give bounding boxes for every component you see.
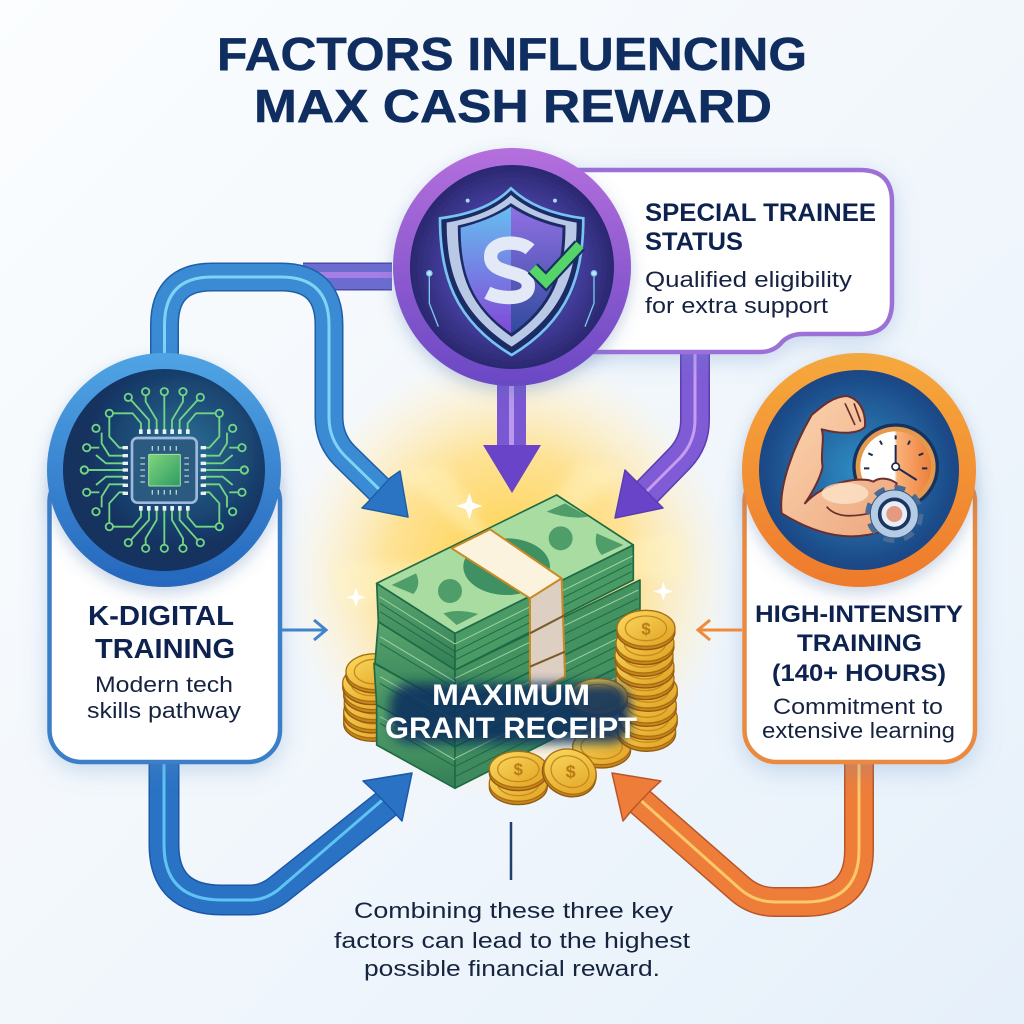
text: extensive learning <box>762 718 955 743</box>
label: maximum grant receipt <box>385 679 637 745</box>
label: maximum grant receipt: GRANT RECEIPT <box>385 712 637 745</box>
blue band <box>164 277 388 498</box>
navy label backing <box>390 683 630 743</box>
front coins <box>489 620 651 805</box>
purple feeder <box>303 275 392 276</box>
arrow: k-digital to grant, bottom route <box>164 764 412 900</box>
text: for extra support <box>645 293 828 318</box>
heading: TRAINING <box>95 633 235 664</box>
text: Commitment to <box>773 694 943 719</box>
icon: shield with check <box>393 148 631 386</box>
panel: high-intensity training <box>744 470 975 762</box>
title: FACTORS INFLUENCING <box>217 28 807 80</box>
text <box>645 267 852 318</box>
left coin pile <box>343 654 404 741</box>
heading: K-DIGITAL <box>88 600 234 631</box>
footer caption: possible financial reward. <box>364 956 660 981</box>
text: skills pathway <box>87 698 241 723</box>
heading: HIGH-INTENSITY <box>755 601 963 628</box>
front coins: $ <box>514 760 524 779</box>
icon: circuit chip <box>47 353 281 587</box>
note bundles <box>374 495 640 788</box>
central glow <box>285 350 735 800</box>
footer caption <box>334 898 691 981</box>
icon: flexed arm, clock and gear <box>742 353 976 587</box>
right coin pile <box>569 610 677 768</box>
panel: special trainee status <box>580 170 892 352</box>
title <box>217 28 807 132</box>
money stack <box>343 493 677 805</box>
heading <box>88 600 235 664</box>
arrow: special status to grant, centre <box>483 380 541 493</box>
label: maximum grant receipt: MAXIMUM <box>432 679 590 712</box>
footer caption: Combining these three key <box>354 898 674 923</box>
heading: (140+ HOURS) <box>772 660 946 687</box>
text: Qualified eligibility <box>645 267 852 292</box>
front coins: $ <box>566 761 576 781</box>
text <box>762 694 955 743</box>
connector line <box>510 822 512 880</box>
arrow: k-digital to grant, top route <box>164 275 408 517</box>
front coins: $ <box>641 620 651 639</box>
arrow: high-intensity to grant <box>612 760 859 902</box>
sparkles <box>346 493 673 607</box>
arrow: special status to grant, right <box>615 345 695 518</box>
footer caption: factors can lead to the highest <box>334 928 691 953</box>
small arrow: high-intensity to centre <box>698 620 742 640</box>
title: MAX CASH REWARD <box>254 80 772 132</box>
paper band <box>452 529 565 697</box>
heading <box>645 199 876 256</box>
small arrow: k-digital to centre <box>282 620 326 640</box>
text: Modern tech <box>95 672 233 697</box>
heading: STATUS <box>645 228 743 256</box>
text <box>87 672 241 723</box>
panel: k-digital training <box>50 470 280 762</box>
heading: SPECIAL TRAINEE <box>645 199 876 227</box>
heading: TRAINING <box>797 630 922 657</box>
heading <box>755 601 963 687</box>
